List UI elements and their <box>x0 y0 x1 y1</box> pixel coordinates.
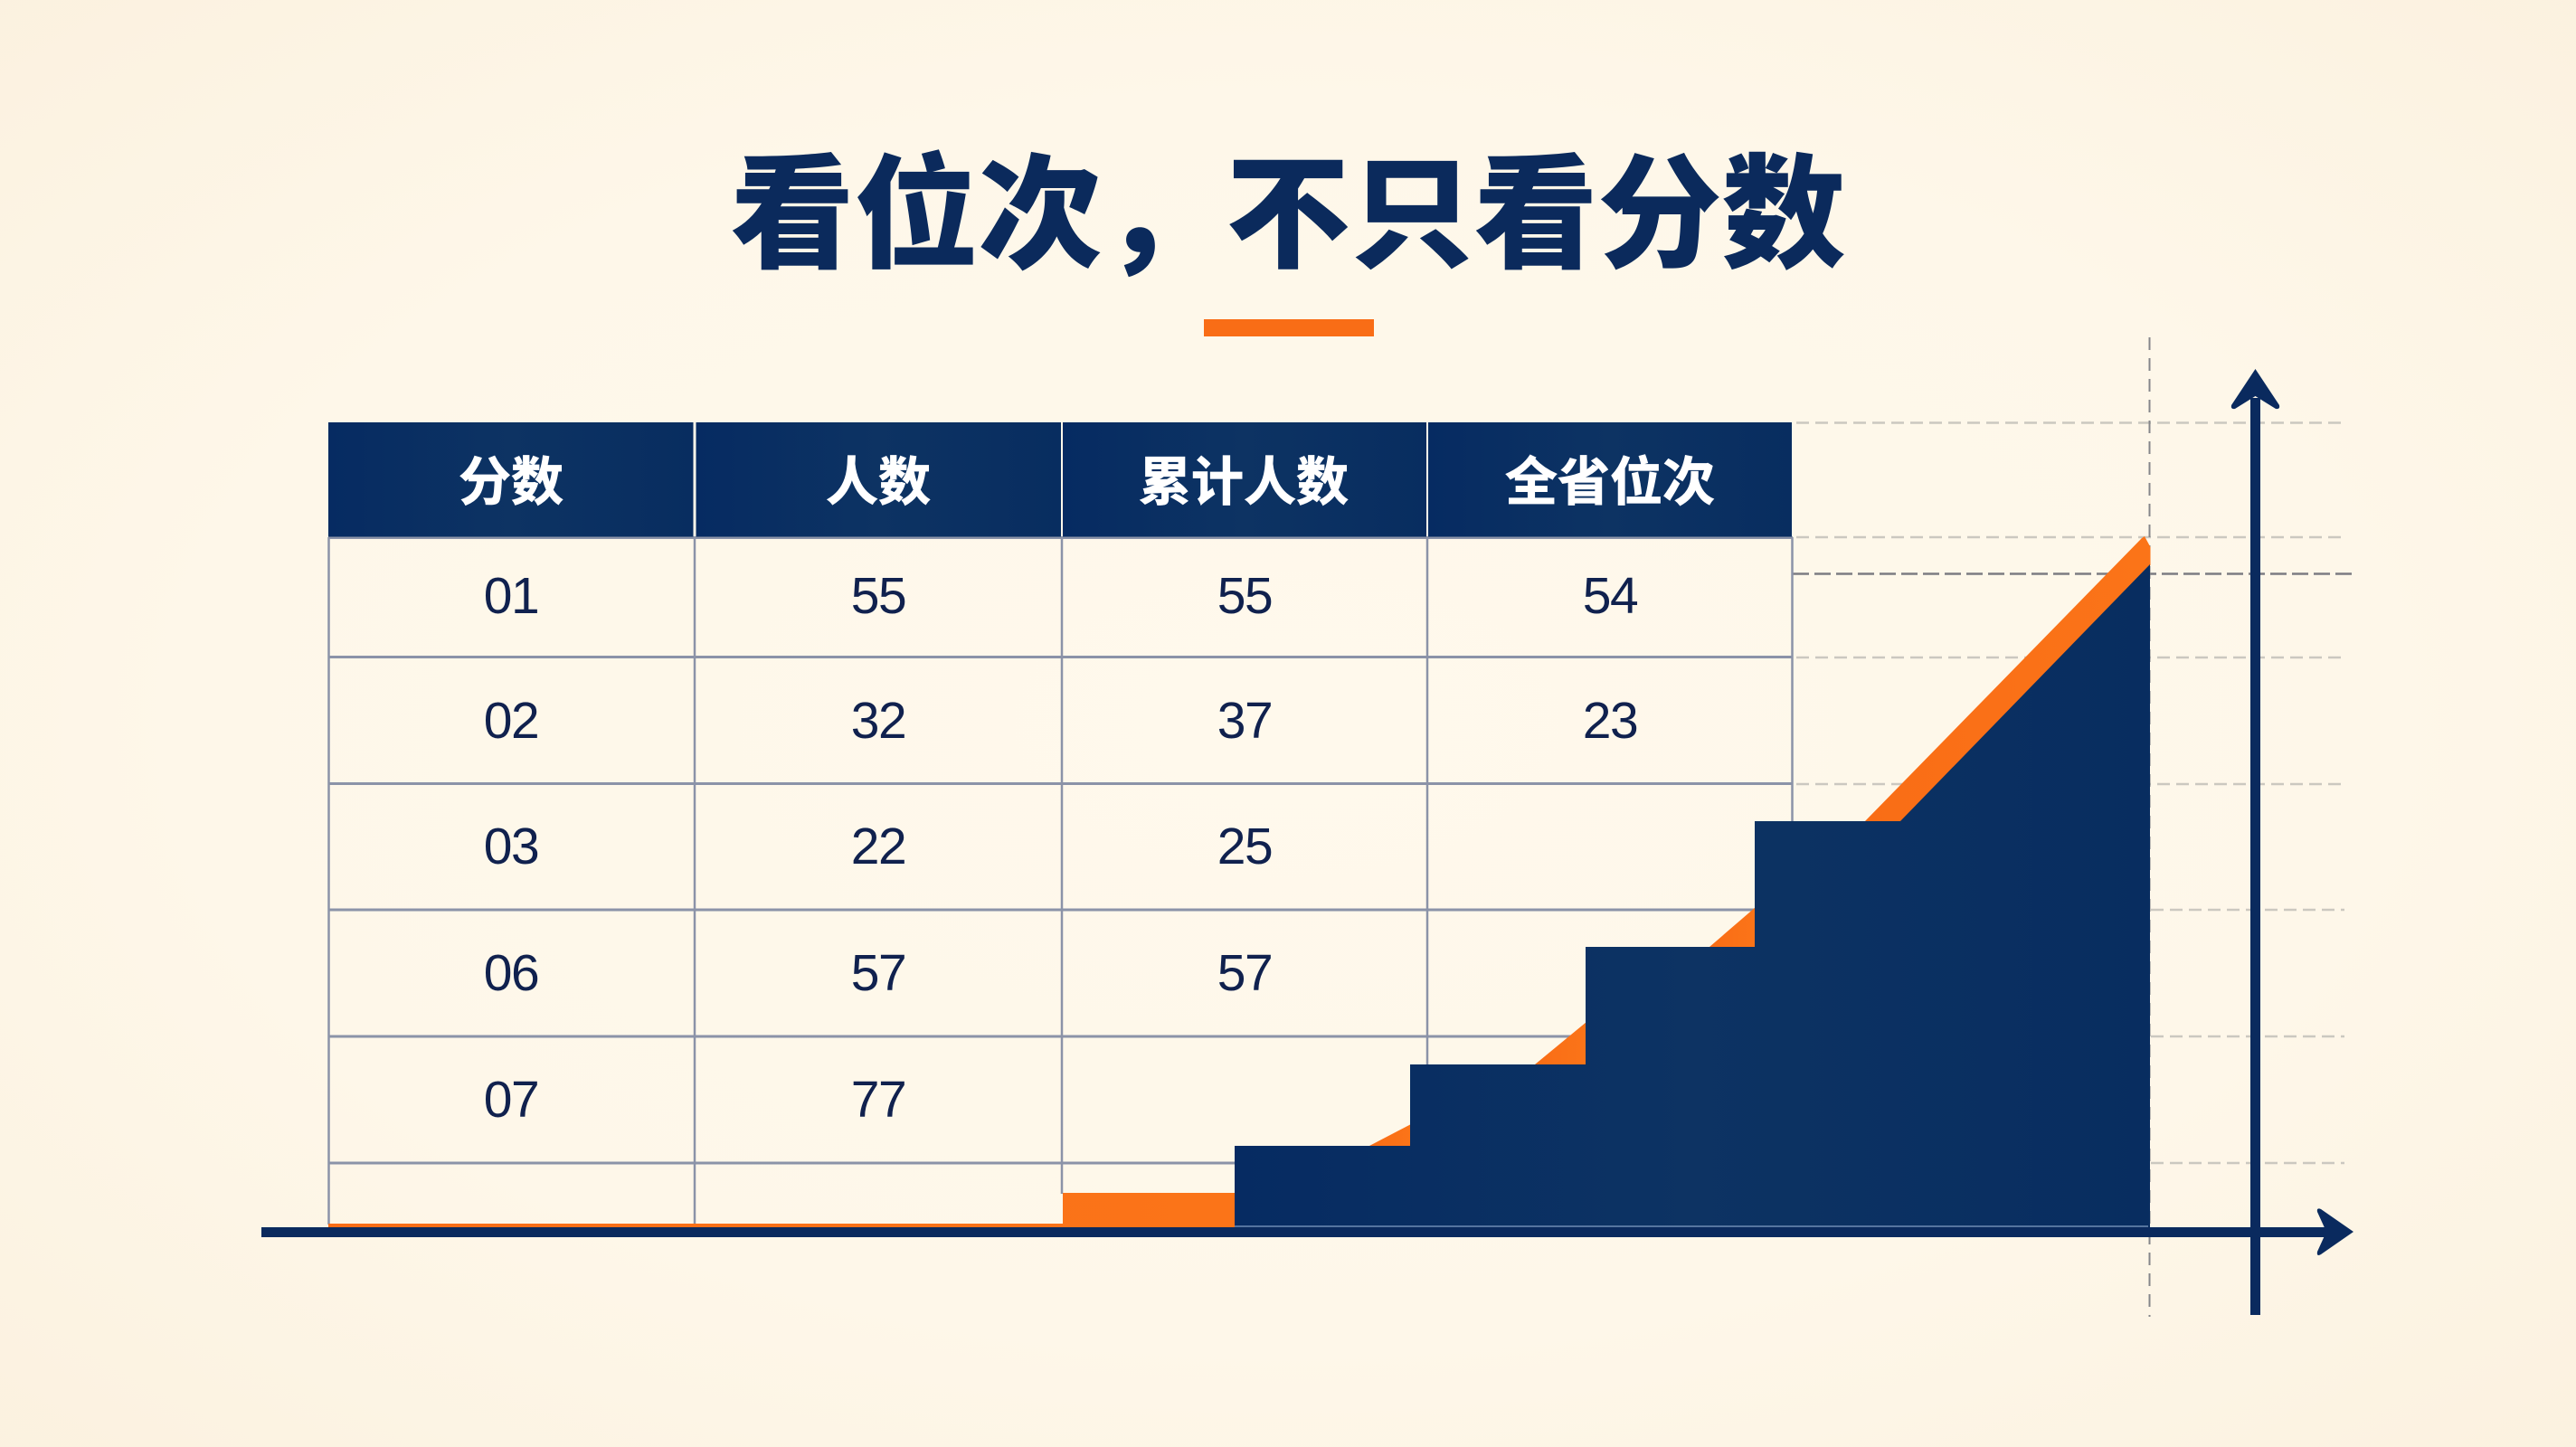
table row 02: 23 <box>1583 692 1637 750</box>
table row 06 <box>484 944 1272 1002</box>
table row 07: 07 <box>484 1071 538 1129</box>
table row 07 <box>484 1071 905 1129</box>
table row 06: 57 <box>851 944 905 1002</box>
table row 02: 37 <box>1217 692 1272 750</box>
orange rising band <box>328 536 2151 1227</box>
table row 03: 03 <box>484 818 538 875</box>
table row 07: 77 <box>851 1071 905 1129</box>
table header row: 累计人数 <box>1139 453 1349 512</box>
table row 02 <box>484 692 1637 750</box>
table row 01: 55 <box>1217 567 1272 625</box>
table row 06: 57 <box>1217 944 1272 1002</box>
table row 01: 01 <box>484 567 538 625</box>
table row 03: 25 <box>1217 818 1272 875</box>
navy stepped area chart <box>1235 564 2150 1227</box>
table row 02: 02 <box>484 692 538 750</box>
axis highlight line <box>1235 1225 2148 1227</box>
table row 06: 06 <box>484 944 538 1002</box>
table grid <box>328 537 1793 1225</box>
table header row: 分数 <box>459 453 564 512</box>
y axis arrow <box>2231 369 2279 1315</box>
table row 02: 32 <box>851 692 905 750</box>
x axis arrow <box>261 1208 2353 1255</box>
reference guide lines <box>1793 337 2355 1317</box>
table row 01 <box>484 567 1638 625</box>
table row 03: 22 <box>851 818 905 875</box>
table header row: 全省位次 <box>1505 453 1715 512</box>
title underline accent <box>1204 319 1374 336</box>
table row 01: 55 <box>851 567 905 625</box>
table header row: 人数 <box>826 453 931 512</box>
table row 03 <box>484 818 1272 875</box>
table header row <box>328 422 1792 537</box>
title: 看位次，不只看分数 <box>730 147 1846 285</box>
table: score ranking <box>328 422 1793 1225</box>
table row 01: 54 <box>1583 567 1638 625</box>
